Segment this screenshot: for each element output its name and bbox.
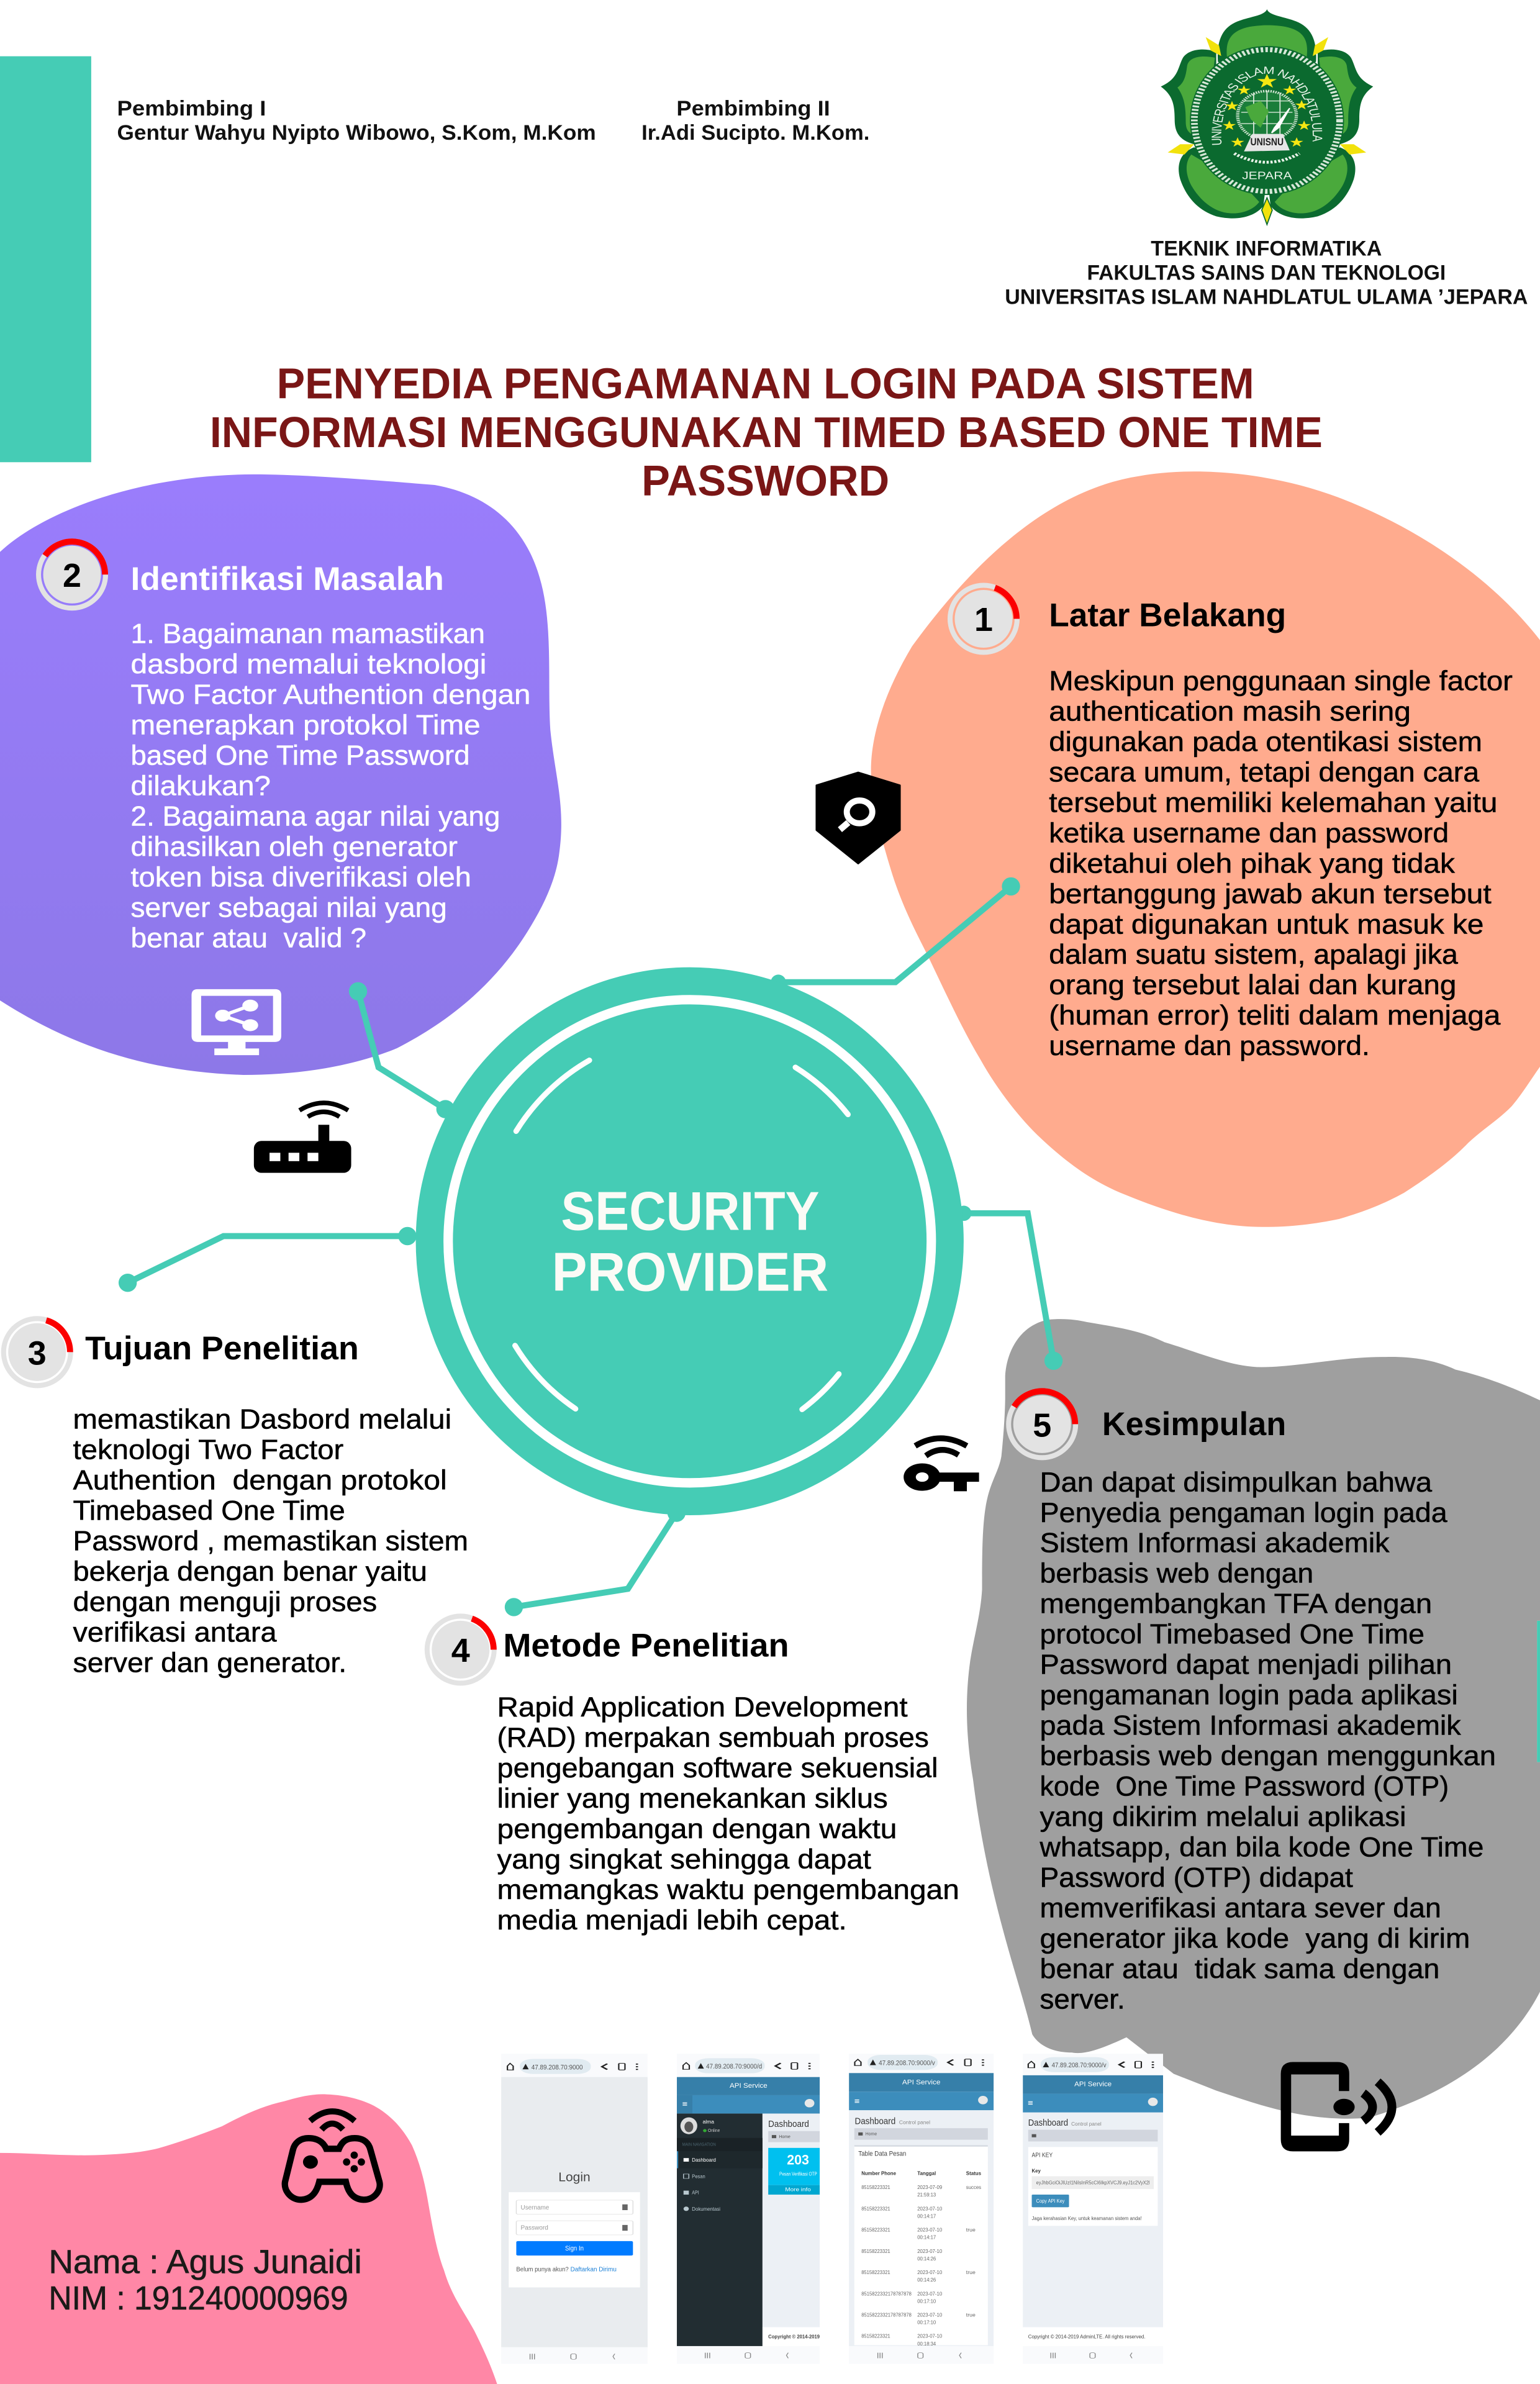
- body text: protocol Timebased One Time: [1040, 1620, 1424, 1650]
- body text: memastikan Dasbord melalui: [73, 1405, 451, 1435]
- phone: dashboard: More info: [785, 2187, 811, 2193]
- phone: data table: 47.89.208.70:9000/v: [879, 2059, 935, 2067]
- phone: data table: 2023-07-10: [917, 2270, 942, 2275]
- body text: diketahui oleh pihak yang tidak: [1049, 848, 1456, 879]
- icon: wifi key: [904, 1438, 979, 1491]
- body text: Password , memastikan sistem: [73, 1526, 468, 1557]
- body text: linier yang menekankan siklus: [497, 1783, 888, 1814]
- university logo: ★: [1289, 135, 1305, 150]
- phone: data table: 85158223321: [861, 2249, 890, 2254]
- body text: authentication masih sering: [1049, 697, 1411, 727]
- badge 5: [1006, 1388, 1078, 1460]
- student identity: [48, 2244, 362, 2317]
- panel blob: peach: [871, 471, 1540, 1227]
- connector 5: [956, 1206, 1062, 1370]
- body text: server sebagai nilai yang: [131, 892, 447, 923]
- badge 2: 2: [63, 557, 81, 594]
- body text: teknologi Two Factor: [73, 1435, 343, 1466]
- phone: data table: 85158223321: [861, 2270, 890, 2275]
- phone: data table: 00:17:10: [917, 2320, 936, 2326]
- student identity: NIM : 191240000969: [48, 2280, 348, 2317]
- body text: dapat digunakan untuk masuk ke: [1049, 909, 1483, 940]
- phone: data table: true: [966, 2313, 976, 2318]
- phone: dashboard: Online: [708, 2128, 720, 2133]
- body text: kode One Time Password (OTP): [1040, 1771, 1449, 1802]
- phone: dashboard: [677, 2054, 820, 2364]
- body text: ketika username dan password: [1049, 818, 1449, 848]
- body text: tersebut memiliki kelemahan yaitu: [1049, 787, 1497, 818]
- faculty text: TEKNIK INFORMATIKA: [1151, 237, 1382, 260]
- panel blob: gray: [967, 1319, 1540, 2119]
- section 5: kesimpulan: [1006, 1388, 1496, 2015]
- body text: bertanggung jawab akun tersebut: [1049, 879, 1492, 909]
- body text: pengebangan software sekuensial: [497, 1753, 938, 1783]
- section 1: latar belakang: [948, 582, 1513, 1061]
- phone: data table: 00:14:26: [917, 2256, 936, 2262]
- phone: api key: Jaga kerahasian Key, untuk keamanan sistem anda!: [1032, 2216, 1142, 2221]
- body text: Meskipun penggunaan single factor: [1049, 666, 1513, 697]
- university logo: UNISNU: [1251, 137, 1284, 148]
- phone: data table: 00:14:26: [917, 2277, 936, 2283]
- body text: [73, 1405, 468, 1678]
- central label: SECURITY: [561, 1181, 820, 1242]
- section 2: identifikasi masalah: [36, 538, 530, 953]
- phone: login: Password: [521, 2225, 548, 2231]
- phone: api key: [1023, 2054, 1163, 2364]
- phone: data table: Status: [966, 2170, 981, 2176]
- supervisors text: Pembimbing II: [676, 97, 830, 120]
- phone: data table: Control panel: [899, 2119, 930, 2125]
- body text: [1040, 1467, 1496, 2015]
- panel blob: purple: [0, 474, 561, 1075]
- university logo: ★: [1297, 119, 1312, 133]
- phone: data table: 8515822332178787878: [861, 2291, 912, 2296]
- body text: (RAD) merpakan sembuah proses: [497, 1723, 929, 1753]
- body text: generator jika kode yang di kirim: [1040, 1923, 1470, 1954]
- phone: data table: Home: [866, 2132, 877, 2136]
- faculty text: FAKULTAS SAINS DAN TEKNOLOGI: [1087, 261, 1446, 284]
- body text: orang tersebut lalai dan kurang: [1049, 970, 1456, 1000]
- badge 3: 3: [28, 1335, 47, 1372]
- phone: dashboard: MAIN NAVIGATION: [682, 2142, 716, 2147]
- phone: dashboard: Home: [779, 2134, 790, 2139]
- phone: dashboard: 47.89.208.70:9000/d: [706, 2062, 762, 2070]
- title: [210, 359, 1323, 505]
- university logo: ★: [1294, 98, 1310, 112]
- university logo: JEPARA: [1242, 170, 1292, 182]
- body text: dasbord memalui teknologi: [131, 650, 486, 680]
- body text: Two Factor Authention dengan: [131, 680, 530, 710]
- phone: data table: 00:14:17: [917, 2235, 936, 2241]
- university logo: ★: [1236, 83, 1252, 97]
- phone: api key: API KEY: [1032, 2152, 1053, 2159]
- icon: monitor share: [191, 989, 281, 1055]
- body text: [131, 619, 530, 953]
- icon: wifi router: [254, 1103, 351, 1173]
- central label: [552, 1181, 828, 1303]
- connector 3: [119, 1227, 417, 1292]
- body text: memverifikasi antara sever dan: [1040, 1893, 1441, 1923]
- phone: api key: Copyright © 2014-2019 AdminLTE. All rights reserved.: [1028, 2334, 1145, 2339]
- phone: dashboard: Dokumentasi: [692, 2206, 720, 2212]
- body text: [1049, 666, 1513, 1061]
- body text: server.: [1040, 1984, 1125, 2015]
- phone: login: Daftarkan Dirimu: [571, 2266, 617, 2273]
- body text: Rapid Application Development: [497, 1692, 908, 1723]
- body text: Dan dapat disimpulkan bahwa: [1040, 1467, 1432, 1498]
- phone: data table: 85158223321: [861, 2206, 890, 2211]
- phone: dashboard: Dashboard: [692, 2157, 716, 2163]
- central circle: [416, 968, 964, 1515]
- body text: bekerja dengan benar yaitu: [73, 1557, 427, 1587]
- body text: [497, 1692, 959, 1936]
- body text: Password dapat menjadi pilihan: [1040, 1650, 1452, 1680]
- supervisors text: Ir.Adi Sucipto. M.Kom.: [641, 121, 869, 145]
- phone: api key: Control panel: [1071, 2121, 1102, 2127]
- phone: data table: 2023-07-10: [917, 2249, 942, 2254]
- body text: Authention dengan protokol: [73, 1466, 447, 1496]
- phone: data table: 2023-07-10: [917, 2313, 942, 2318]
- phone: dashboard: alma: [702, 2119, 714, 2124]
- phone: data table: 00:17:10: [917, 2298, 936, 2304]
- phone: api key: API Service: [1074, 2080, 1112, 2088]
- body text: berbasis web dengan menggunkan: [1040, 1741, 1496, 1772]
- body text: username dan password.: [1049, 1031, 1370, 1061]
- heading: Kesimpulan: [1102, 1406, 1286, 1443]
- phone: data table: 21:59:13: [917, 2192, 936, 2198]
- phone: login: 47.89.208.70:9000: [532, 2064, 583, 2071]
- body text: Penyedia pengaman login pada: [1040, 1498, 1447, 1528]
- phone: data table: Dashboard: [854, 2116, 895, 2126]
- phone: dashboard: Dashboard: [768, 2119, 809, 2129]
- badge 5: 5: [1033, 1407, 1051, 1444]
- body text: Password (OTP) didapat: [1040, 1862, 1354, 1893]
- phone: dashboard: Pesan: [692, 2173, 705, 2179]
- body text: whatsapp, dan bila kode One Time: [1040, 1832, 1483, 1862]
- heading: Metode Penelitian: [503, 1628, 789, 1664]
- body text: dihasilkan oleh generator: [131, 832, 458, 862]
- phone: data table: 00:18:34: [917, 2341, 936, 2347]
- badge 2: [36, 538, 108, 610]
- section 3: tujuan penelitian: [1, 1316, 468, 1678]
- university logo: ★: [1225, 99, 1239, 114]
- university logo: ★: [1221, 119, 1237, 133]
- icon: shield search: [817, 773, 900, 864]
- badge 1: [948, 582, 1020, 655]
- phone: dashboard: API: [692, 2190, 699, 2196]
- connectors and central circle: [119, 877, 1062, 1616]
- phone: api key: Key: [1032, 2168, 1041, 2173]
- body text: (human error) teliti dalam menjaga: [1049, 1000, 1501, 1031]
- phone: data table: 85158223321: [861, 2334, 890, 2339]
- connector 4: [505, 1503, 686, 1616]
- body text: pengamanan login pada aplikasi: [1040, 1680, 1458, 1711]
- screenshots row: Pesan Verifikasi OTP: [779, 2171, 817, 2177]
- panel blob: pink: [0, 2094, 497, 2384]
- body text: dengan menguji proses: [73, 1587, 377, 1618]
- phone: data table: 00:14:17: [917, 2214, 936, 2219]
- body text: Timebased One Time: [73, 1496, 345, 1526]
- university logo: [1161, 9, 1374, 226]
- badge 4: 4: [451, 1632, 470, 1669]
- supervisors text: Pembimbing I: [117, 97, 266, 120]
- body text: berbasis web dengan: [1040, 1559, 1313, 1589]
- phone: api key: 47.89.208.70:9000/v: [1052, 2062, 1107, 2069]
- phone: data table: 2023-07-10: [917, 2334, 942, 2339]
- faculty text: UNIVERSITAS ISLAM NAHDLATUL ULAMA ’JEPARA: [1005, 286, 1528, 309]
- phone: data table: Tanggal: [917, 2170, 936, 2176]
- body text: menerapkan protokol Time: [131, 710, 481, 741]
- title: PASSWORD: [641, 456, 889, 505]
- phone: data table: true: [966, 2228, 976, 2232]
- body text: memangkas waktu pengembangan: [497, 1875, 959, 1905]
- phone: dashboard: 203: [787, 2152, 809, 2168]
- screenshots row: [501, 2054, 1163, 2364]
- body text: mengembangkan TFA dengan: [1040, 1589, 1432, 1620]
- connector 1: [771, 877, 1020, 990]
- phone: data table: true: [966, 2270, 976, 2275]
- badge 3: [1, 1316, 73, 1388]
- body text: pengembangan dengan waktu: [497, 1814, 897, 1844]
- body text: 2. Bagaimana agar nilai yang: [131, 801, 500, 832]
- phone: login: Username: [521, 2205, 549, 2211]
- supervisors text: [117, 97, 869, 145]
- phone: api key: Dashboard: [1028, 2118, 1068, 2128]
- screenshots row: Copyright © 2014-2019: [768, 2334, 820, 2339]
- section 4: metode penelitian: [425, 1613, 959, 1936]
- icon: phone signal: [1281, 2062, 1392, 2151]
- phone: data table: succes: [966, 2185, 981, 2190]
- phone: data table: Table Data Pesan: [858, 2150, 906, 2157]
- body text: token bisa diverifikasi oleh: [131, 862, 471, 892]
- body text: benar atau valid ?: [131, 923, 366, 953]
- university logo: ★: [1256, 70, 1279, 92]
- central label: PROVIDER: [552, 1241, 828, 1303]
- phone: data table: 85158223321: [861, 2228, 890, 2232]
- body text: yang dikirim melalui aplikasi: [1040, 1802, 1406, 1832]
- phone: data table: 2023-07-10: [917, 2228, 942, 2232]
- phone: data table: [849, 2054, 994, 2364]
- phone: data table: 2023-07-10: [917, 2291, 942, 2296]
- body text: dilakukan?: [131, 771, 271, 801]
- body text: based One Time Password: [131, 741, 469, 771]
- phone: dashboard: API Service: [730, 2082, 768, 2089]
- phone: login: Sign In: [565, 2245, 584, 2252]
- university logo: ★: [1282, 83, 1297, 97]
- body text: verifikasi antara: [73, 1617, 277, 1647]
- phone: api key: Copy API Key: [1036, 2198, 1065, 2204]
- phone: data table: Number Phone: [861, 2170, 896, 2176]
- heading: Identifikasi Masalah: [131, 561, 444, 597]
- body text: benar atau tidak sama dengan: [1040, 1954, 1439, 1984]
- student identity: Nama : Agus Junaidi: [48, 2244, 362, 2280]
- body text: digunakan pada otentikasi sistem: [1049, 727, 1482, 757]
- body text: pada Sistem Informasi akademik: [1040, 1711, 1461, 1741]
- phone: login: Belum punya akun?: [516, 2266, 569, 2273]
- phone: data table: API Service: [902, 2078, 940, 2086]
- university logo: ★: [1230, 135, 1245, 150]
- title: INFORMASI MENGGUNAKAN TIMED BASED ONE TIME: [210, 408, 1323, 456]
- heading: Latar Belakang: [1049, 597, 1286, 634]
- phone: api key: eyJhbGciOiJIUzI1NiIsInR5cCI6IkpXVCJ9.eyJ1c2VyX2l: [1036, 2180, 1150, 2186]
- phone: data table: 2023-07-10: [917, 2206, 942, 2211]
- body text: yang singkat sehingga dapat: [497, 1844, 871, 1875]
- title: PENYEDIA PENGAMANAN LOGIN PADA SISTEM: [277, 359, 1254, 407]
- faculty text: [1005, 237, 1528, 309]
- body text: Sistem Informasi akademik: [1040, 1528, 1390, 1559]
- supervisors text: Gentur Wahyu Nyipto Wibowo, S.Kom, M.Kom: [117, 121, 596, 145]
- teal corner bar: [0, 57, 91, 462]
- badge 1: 1: [974, 601, 993, 638]
- right edge strip: [1537, 1621, 1540, 1762]
- body text: 1. Bagaimanan mamastikan: [131, 619, 485, 650]
- phone: data table: 85158223321: [861, 2185, 890, 2190]
- phone: data table: 8515822332178787878: [861, 2313, 912, 2318]
- body text: secara umum, tetapi dengan cara: [1049, 757, 1479, 787]
- connector 2: [349, 982, 455, 1118]
- badge 4: [425, 1613, 497, 1685]
- phone: login: [501, 2054, 648, 2364]
- body text: media menjadi lebih cepat.: [497, 1905, 847, 1936]
- phone: login: Login: [558, 2169, 591, 2184]
- icon: game controller: [285, 2111, 380, 2200]
- phone: data table: 2023-07-09: [917, 2185, 942, 2190]
- heading: Tujuan Penelitian: [85, 1330, 359, 1367]
- body text: server dan generator.: [73, 1647, 346, 1678]
- body text: dalam suatu sistem, apalagi jika: [1049, 940, 1458, 970]
